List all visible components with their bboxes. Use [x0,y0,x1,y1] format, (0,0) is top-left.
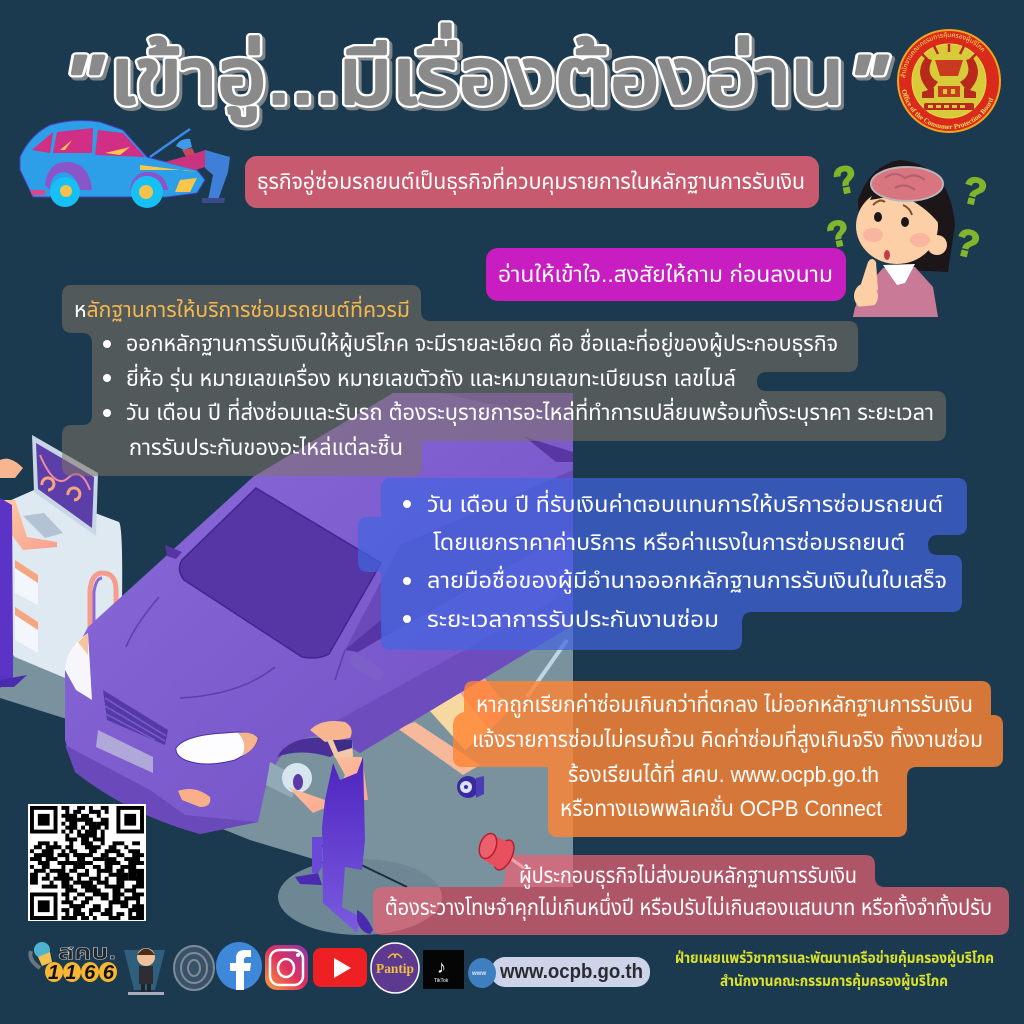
icon: OCPB seal [897,29,1001,133]
garage floor [0,625,573,935]
icon: TikTok [423,950,464,989]
text: issuing department: สำนักงานคณะกรรมการคุ้มครองผู้บริโภค [720,972,948,991]
panel: magenta reminder pill [486,248,846,301]
icon: OCPB hotline 1166: สคบ. [58,941,116,964]
wheel arch shadow [277,738,334,757]
panel: receipt details (blue) [358,478,967,650]
icon: cartoon officer avatar [124,948,165,995]
panel: quick facts red pill [245,156,819,208]
text: regulated business: ธุรกิจอู่ซ่อมรถยนต์เป็นธุรกิจที่ควบคุมรายการในหลักฐานการรับเงิน [257,166,805,195]
side window [345,470,573,652]
title: เข้าอู่...มีเรื่องต้องอ่าน [110,24,844,124]
icon: TikTok: ♪ [437,957,446,977]
title: เข้าอู่...มีเรื่องต้องอ่าน [110,24,844,124]
text: read before signing: อ่านให้เข้าใจ..สงสัยให้ถาม ก่อนลงนาม [498,262,833,287]
purple car [65,393,573,834]
text: evidence bullet list: วัน เดือน ปี ที่ส่งซ่อมและรับรถ ต้องระบุรายการอะไหล่ที่ทำการเปลี่ยนพร้อมทั้งระบุราคา ระยะเวลา [126,397,934,426]
illustration: confused girl with question marks: ? [830,158,861,204]
title: " [848,39,888,129]
icon: Facebook [216,942,262,990]
panel: penalty notice (red) [373,855,1009,935]
text: evidence bullet list: ยี่ห้อ รุ่น หมายเลขเครื่อง หมายเลขตัวถัง และหมายเลขทะเบียนรถ เลขไมล์ [126,363,736,392]
icon: website pill: www.ocpb.go.th [499,961,643,983]
text: receipt bullet list [403,489,947,632]
car jack [397,640,567,798]
text: penalty: ผู้ประกอบธุรกิจไม่ส่งมอบหลักฐานการรับเงิน [519,863,857,889]
windshield [179,488,381,658]
heading: recommended service evidence: หลักฐานการให้บริการซ่อมรถยนต์ที่ควรมี [74,295,410,322]
text: issuing department: ฝ่ายเผยแพร่วิชาการและพัฒนาเครือข่ายคุ้มครองผู้บริโภค [675,949,994,968]
icon: push pin [476,831,524,873]
text: evidence bullet list: การรับประกันของอะไหล่แต่ละชิ้น [129,433,403,460]
mechanic at wheel [282,721,373,934]
mechanic [176,139,192,150]
text: receipt bullet list: โดยแยกราคาค่าบริการ หรือค่าแรงในการซ่อมรถยนต์ [433,530,905,555]
text: receipt bullet list: ลายมือชื่อของผู้มีอำนาจออกหลักฐานการรับเงินในใบเสร็จ [427,565,947,594]
mirror [350,654,384,680]
worker at machine [0,459,57,688]
icon: TikTok: TikTok [434,978,449,984]
icon: OCPB seal: สำนักงานคณะกรรมการคุ้มครองผู้บริโภค [900,32,984,78]
title [64,24,888,129]
text: how to complain: หากถูกเรียกค่าซ่อมเกินกว่าที่ตกลง ไม่ออกหลักฐานการรับเงิน [476,689,973,718]
text: penalty [385,863,992,921]
text: receipt bullet list: ระยะเวลาการรับประกันงานซ่อม [427,607,719,632]
grille [103,690,168,745]
diagnostic machine [0,435,122,680]
icon: OCPB grey logo [174,946,214,990]
panel: recommended service evidence (grey) [62,285,946,476]
icon: OCPB seal: Office of the Consumer Protection Board [902,90,994,130]
icon: website pill: www [471,971,486,977]
text: how to complain: หรือทางแอพพลิเคชั่น OCPB Connect [560,794,882,821]
icon: Pantip [371,943,419,993]
illustration: confused girl with question marks: ? [958,169,991,215]
icon: OCPB hotline 1166: 1166 [48,962,115,984]
rear window [525,437,573,462]
fog light [178,789,210,807]
illustration: confused girl with question marks [823,158,991,317]
left headlight [65,633,92,700]
illustration: car repair garage [0,393,573,935]
licence plate [96,730,153,773]
text: how to complain [472,689,983,821]
panel: complaint channel (orange) [453,681,1003,837]
text: issuing department [675,949,994,991]
title: " [64,39,104,129]
text: evidence bullet list: ออกหลักฐานการรับเงินให้ผู้บริโภค จะมีรายละเอียด คือ ชื่อและที่อยู่ของผู้ประกอบธุรกิจ [126,328,838,357]
icon: OCPB hotline 1166 [30,941,117,984]
footer icon row [30,941,650,995]
right headlight [176,732,258,764]
illustration: confused girl with question marks: ? [823,211,853,256]
text: how to complain: แจ้งรายการซ่อมไม่ครบถ้วน คิดค่าซ่อมที่สูงเกินจริง ทิ้งงานซ่อม [472,724,983,753]
text: how to complain: ร้องเรียนได้ที่ สคบ. www.ocpb.go.th [568,759,879,787]
icon: website pill [468,957,650,988]
icon: Instagram [265,945,308,990]
QR code [28,804,146,921]
icon: Pantip: Pantip [376,962,414,977]
wheel hub [266,762,294,798]
text: receipt bullet list: วัน เดือน ปี ที่รับเงินค่าตอบแทนการให้บริการซ่อมรถยนต์ [427,489,943,517]
title: " [64,39,104,129]
text: evidence bullet list [103,328,934,460]
title: " [848,39,888,129]
hood lines [126,597,345,698]
icon: YouTube [313,948,367,987]
illustration: confused girl with question marks: ? [951,221,984,268]
panel: top-left car with mechanic [20,121,230,208]
